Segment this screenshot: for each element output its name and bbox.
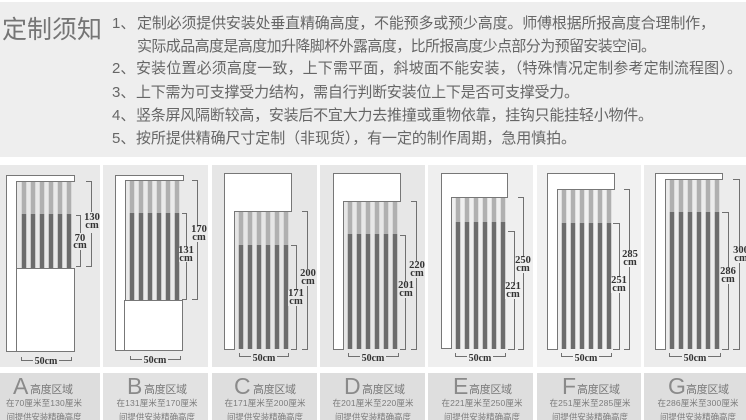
panel: D caption: 高度区域	[362, 382, 405, 396]
panel: B diagram	[103, 165, 208, 367]
panel: F caption: F	[562, 373, 576, 399]
panel: F diagram: cm	[612, 283, 626, 294]
notice list	[112, 15, 742, 147]
panel: C caption	[212, 373, 317, 420]
notice list: 4、	[112, 107, 135, 124]
panel: E diagram	[428, 165, 533, 367]
panel: G caption: 在286厘米至300厘米	[658, 398, 739, 408]
panel: E diagram: 250	[515, 255, 531, 266]
panel: D caption: D	[344, 373, 361, 399]
panel: A caption: 在70厘米至130厘米	[6, 398, 82, 408]
panel: F caption: 高度区域	[577, 382, 620, 396]
notice list: 竖条屏风隔断较高，安装后不宜大力去推撞或重物依靠，挂钩只能挂轻小物件。	[136, 106, 653, 124]
panel: B caption: B	[127, 373, 142, 399]
panel: E caption: 高度区域	[469, 382, 512, 396]
panel: D diagram	[320, 165, 425, 367]
panel: E diagram: 221	[505, 281, 521, 292]
notice list: 安装位置必须高度一致，上下需平面，斜坡面不能安装，（特殊情况定制参考定制流程图）。	[136, 60, 742, 77]
panel: C caption: 高度区域	[253, 382, 296, 396]
panel: G diagram: cm	[721, 274, 735, 285]
panel: F diagram: 251	[611, 275, 627, 286]
panel: B caption	[103, 373, 208, 420]
panel: E diagram: cm	[506, 289, 520, 300]
panel: notice band	[0, 2, 746, 157]
panel: D diagram: cm	[410, 268, 424, 279]
panel: F diagram: 285	[622, 249, 638, 260]
panel: A diagram: 130	[84, 212, 100, 223]
panel: A diagram: 70	[75, 233, 85, 244]
panel: F diagram	[537, 165, 641, 367]
notice list: 3、	[112, 84, 135, 101]
heading: 定制须知: 定制须知	[2, 16, 102, 44]
panel: B diagram: cm	[192, 232, 206, 243]
panel: D diagram: 220	[409, 260, 425, 271]
panel: D caption	[320, 373, 425, 420]
panel: F diagram: cm	[623, 257, 637, 268]
panel: C diagram	[212, 165, 317, 367]
panel: D diagram: 50cm	[362, 353, 385, 364]
panel: B diagram: 50cm	[144, 355, 167, 366]
panel: B diagram: 170	[191, 224, 207, 235]
panel: D diagram: cm	[399, 288, 413, 299]
panel: D diagram: 201	[398, 280, 414, 291]
panel: C caption: C	[234, 373, 251, 399]
panel: G diagram	[644, 165, 746, 367]
notice list: 5、	[112, 130, 135, 147]
panel: B diagram: 131	[178, 245, 194, 256]
panel: G diagram: 286	[720, 266, 736, 277]
panel: E diagram: 50cm	[469, 353, 492, 364]
panel: G caption: G	[668, 373, 686, 399]
notice list: 按所提供精确尺寸定制（非现货），有一定的制作周期，急用慎拍。	[136, 129, 576, 147]
panel: A caption	[0, 373, 100, 420]
panel: D caption: 在201厘米至220厘米	[332, 398, 414, 408]
panel: E diagram: cm	[516, 263, 530, 274]
panel: C diagram: 50cm	[253, 353, 276, 364]
panel: B caption: 高度区域	[144, 382, 187, 396]
panel: E caption	[428, 373, 533, 420]
panel: C diagram: cm	[301, 276, 315, 287]
panel: G caption: 高度区域	[686, 382, 729, 396]
panel: C diagram: 171	[288, 288, 304, 299]
panel: F caption: 在251厘米至285厘米	[550, 398, 631, 408]
notice list: 实际成品高度是高度加升降脚杯外露高度，比所报高度少点部分为预留安装空间。	[137, 38, 656, 55]
panel: G diagram: 50cm	[684, 353, 707, 364]
panel: F diagram: 50cm	[575, 353, 598, 364]
panel: A caption: A	[13, 373, 29, 399]
notice list: 定制必须提供安装处垂直精确高度，不能预多或预少高度。师傅根据所报高度合理制作，	[137, 15, 715, 32]
panel: A diagram	[0, 165, 100, 367]
panel: A diagram: cm	[73, 240, 87, 251]
notice list: 上下需为可支撑受力结构，需自行判断安装位上下是否可支撑受力。	[136, 84, 579, 101]
panel: E caption: 在221厘米至250厘米	[442, 398, 523, 408]
notice list: 1、	[112, 15, 135, 32]
panel: G caption	[644, 373, 746, 420]
panel: B diagram: cm	[179, 253, 193, 264]
panel: C caption: 在171厘米至200厘米	[224, 398, 306, 408]
panel: C diagram: cm	[289, 296, 303, 307]
panel: C diagram: 200	[300, 268, 316, 279]
notice list: 2、	[112, 60, 135, 77]
panel: E caption: E	[453, 373, 468, 399]
panel: A diagram: 50cm	[35, 356, 58, 367]
panel: A diagram: cm	[85, 220, 99, 231]
panel: B caption: 在131厘米至170厘米	[116, 398, 198, 408]
panel: A caption: 高度区域	[30, 382, 73, 396]
panel: F caption	[537, 373, 641, 420]
